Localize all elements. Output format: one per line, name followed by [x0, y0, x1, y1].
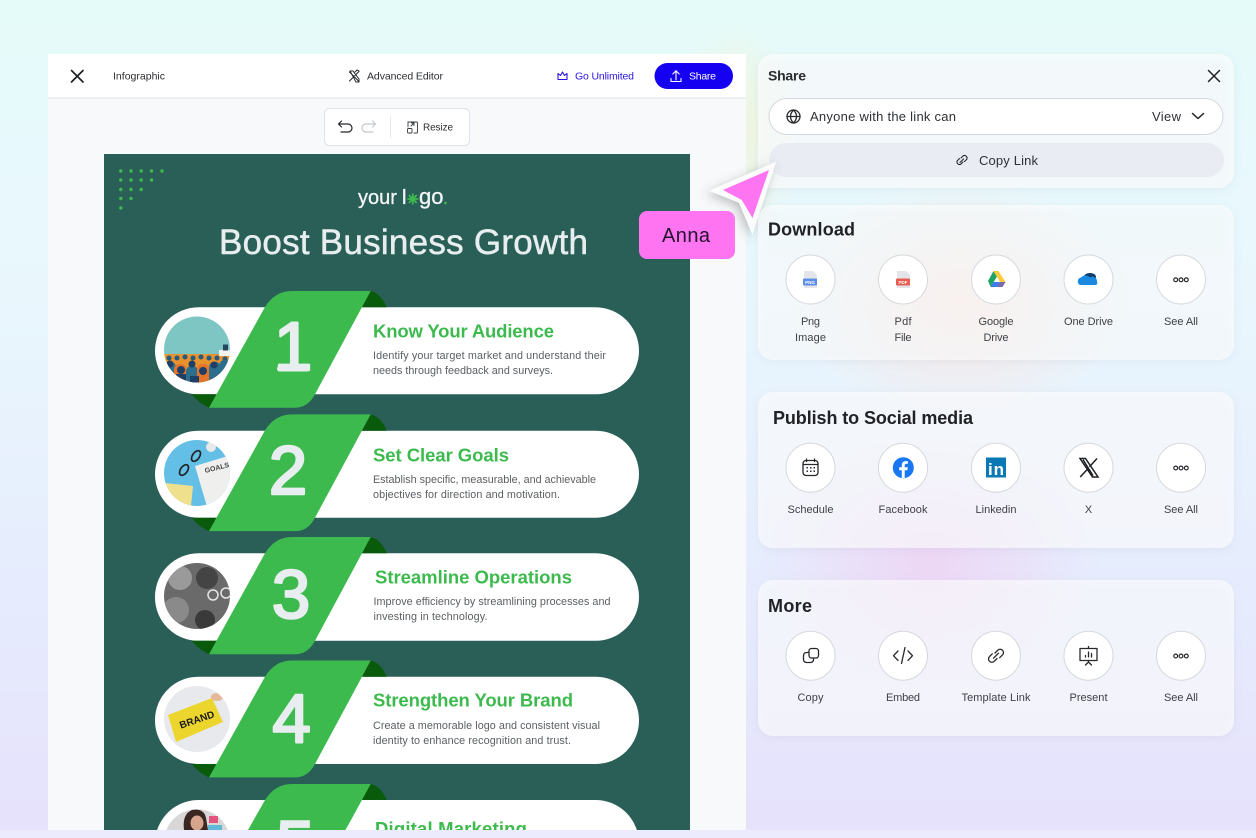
option: pdf file [878, 255, 928, 344]
name tag: Anna: Anna [662, 225, 711, 247]
step 2 [155, 414, 639, 531]
number 4: 4 [272, 680, 311, 757]
panel: editor [48, 54, 746, 830]
description [374, 596, 610, 623]
description: Identify your target market and understand their [373, 350, 606, 362]
option: schedule: Schedule [788, 504, 834, 516]
option: png image: Png [801, 316, 820, 328]
option: google drive: Google [978, 316, 1014, 328]
share heading: Share [768, 68, 806, 84]
option: one drive [1064, 255, 1113, 328]
decorative dots [119, 169, 164, 210]
copy link button [769, 143, 1224, 177]
option: png image: Image [795, 332, 826, 344]
share button [654, 63, 733, 89]
title: Boost Business Growth [219, 223, 588, 262]
description: Establish specific, measurable, and achievable [373, 474, 596, 486]
option: present: Present [1070, 692, 1108, 704]
option: x [1064, 443, 1113, 516]
panel: publish to social media [758, 392, 1234, 548]
go unlimited link: Go Unlimited [575, 70, 634, 82]
option: png image: PNG [805, 280, 815, 285]
panel: download [758, 205, 1234, 360]
option: pdf file: File [894, 332, 912, 344]
cursor arrow [709, 162, 776, 235]
option: png image [786, 255, 835, 344]
option: schedule [786, 443, 835, 516]
logo: your [358, 187, 397, 209]
option: embed: Embed [886, 692, 920, 704]
link permission field: Anyone with the link can [810, 109, 956, 124]
option: linkedin [972, 443, 1020, 516]
photo: audience [164, 316, 230, 384]
heading: Streamline Operations [375, 566, 572, 587]
panel: more [758, 580, 1234, 736]
option: see all [1156, 255, 1206, 328]
number 3: 3 [272, 556, 310, 633]
more heading: More [768, 596, 812, 616]
link permission field: View [1152, 109, 1182, 124]
document name: Infographic [113, 70, 165, 82]
description [373, 350, 606, 377]
description: Improve efficiency by streamlining processes and [374, 596, 610, 608]
photo: brand card: BRAND [178, 709, 216, 732]
description: needs through feedback and surveys. [373, 365, 553, 377]
advanced editor link: Advanced Editor [367, 70, 444, 82]
option: see all [1156, 443, 1206, 516]
copy link button: Copy Link [979, 153, 1038, 168]
description: investing in technology. [374, 611, 488, 623]
option: google drive [972, 255, 1020, 344]
description: objectives for direction and motivation. [373, 489, 560, 501]
option: linkedin: Linkedin [976, 504, 1016, 516]
step 4 [155, 660, 639, 777]
step 5 (cut off by the poster edge) [157, 784, 637, 830]
option: pdf file: Pdf [894, 316, 912, 328]
panel: share [758, 54, 1234, 188]
logo: go [419, 184, 443, 209]
number 1: 1 [274, 308, 312, 385]
icon: close editor [72, 70, 83, 82]
photo: technology gears [163, 563, 231, 630]
option: present [1064, 631, 1113, 704]
toolbar: undo, redo, resize [324, 108, 470, 146]
description [373, 720, 600, 747]
option: x: X [1085, 504, 1093, 516]
link permission field [769, 98, 1223, 134]
option: template link: Template Link [962, 692, 1031, 704]
infographic poster [104, 154, 690, 830]
option: one drive: One Drive [1064, 316, 1113, 328]
heading: Strengthen Your Brand [373, 690, 573, 711]
option: linkedin: in [988, 460, 1004, 479]
share button: Share [689, 70, 716, 82]
logo: l [402, 187, 406, 209]
social heading: Publish to Social media [773, 408, 974, 428]
option: see all: See All [1164, 692, 1198, 704]
step 1 [155, 291, 639, 408]
description: identity to enhance recognition and trust. [373, 735, 571, 747]
download heading: Download [768, 220, 855, 240]
heading: Set Clear Goals [373, 445, 509, 466]
option: see all [1156, 631, 1206, 704]
option: google drive: Drive [984, 332, 1008, 344]
option: template link [962, 631, 1031, 704]
logo [358, 184, 447, 209]
option: pdf file: PDF [898, 280, 908, 285]
option: see all: See All [1164, 504, 1198, 516]
option: embed [878, 631, 928, 704]
icon: close share [1208, 70, 1220, 82]
toolbar: undo, redo, resize: Resize [423, 122, 453, 134]
photo: goals notebook: GOALS [204, 462, 230, 475]
number 2: 2 [269, 432, 307, 509]
photo: brand card [164, 686, 230, 752]
option: facebook: Facebook [878, 504, 928, 516]
option: see all: See All [1164, 316, 1198, 328]
description [373, 474, 596, 501]
description: Create a memorable logo and consistent visual [373, 720, 600, 732]
photo: goals notebook [164, 440, 230, 506]
option: copy [786, 631, 835, 704]
heading: Know Your Audience [373, 320, 554, 341]
step 3 [155, 537, 639, 654]
editor header bar [48, 54, 746, 99]
option: facebook [878, 443, 928, 516]
option: copy: Copy [798, 692, 824, 704]
name tag: Anna [639, 211, 735, 259]
